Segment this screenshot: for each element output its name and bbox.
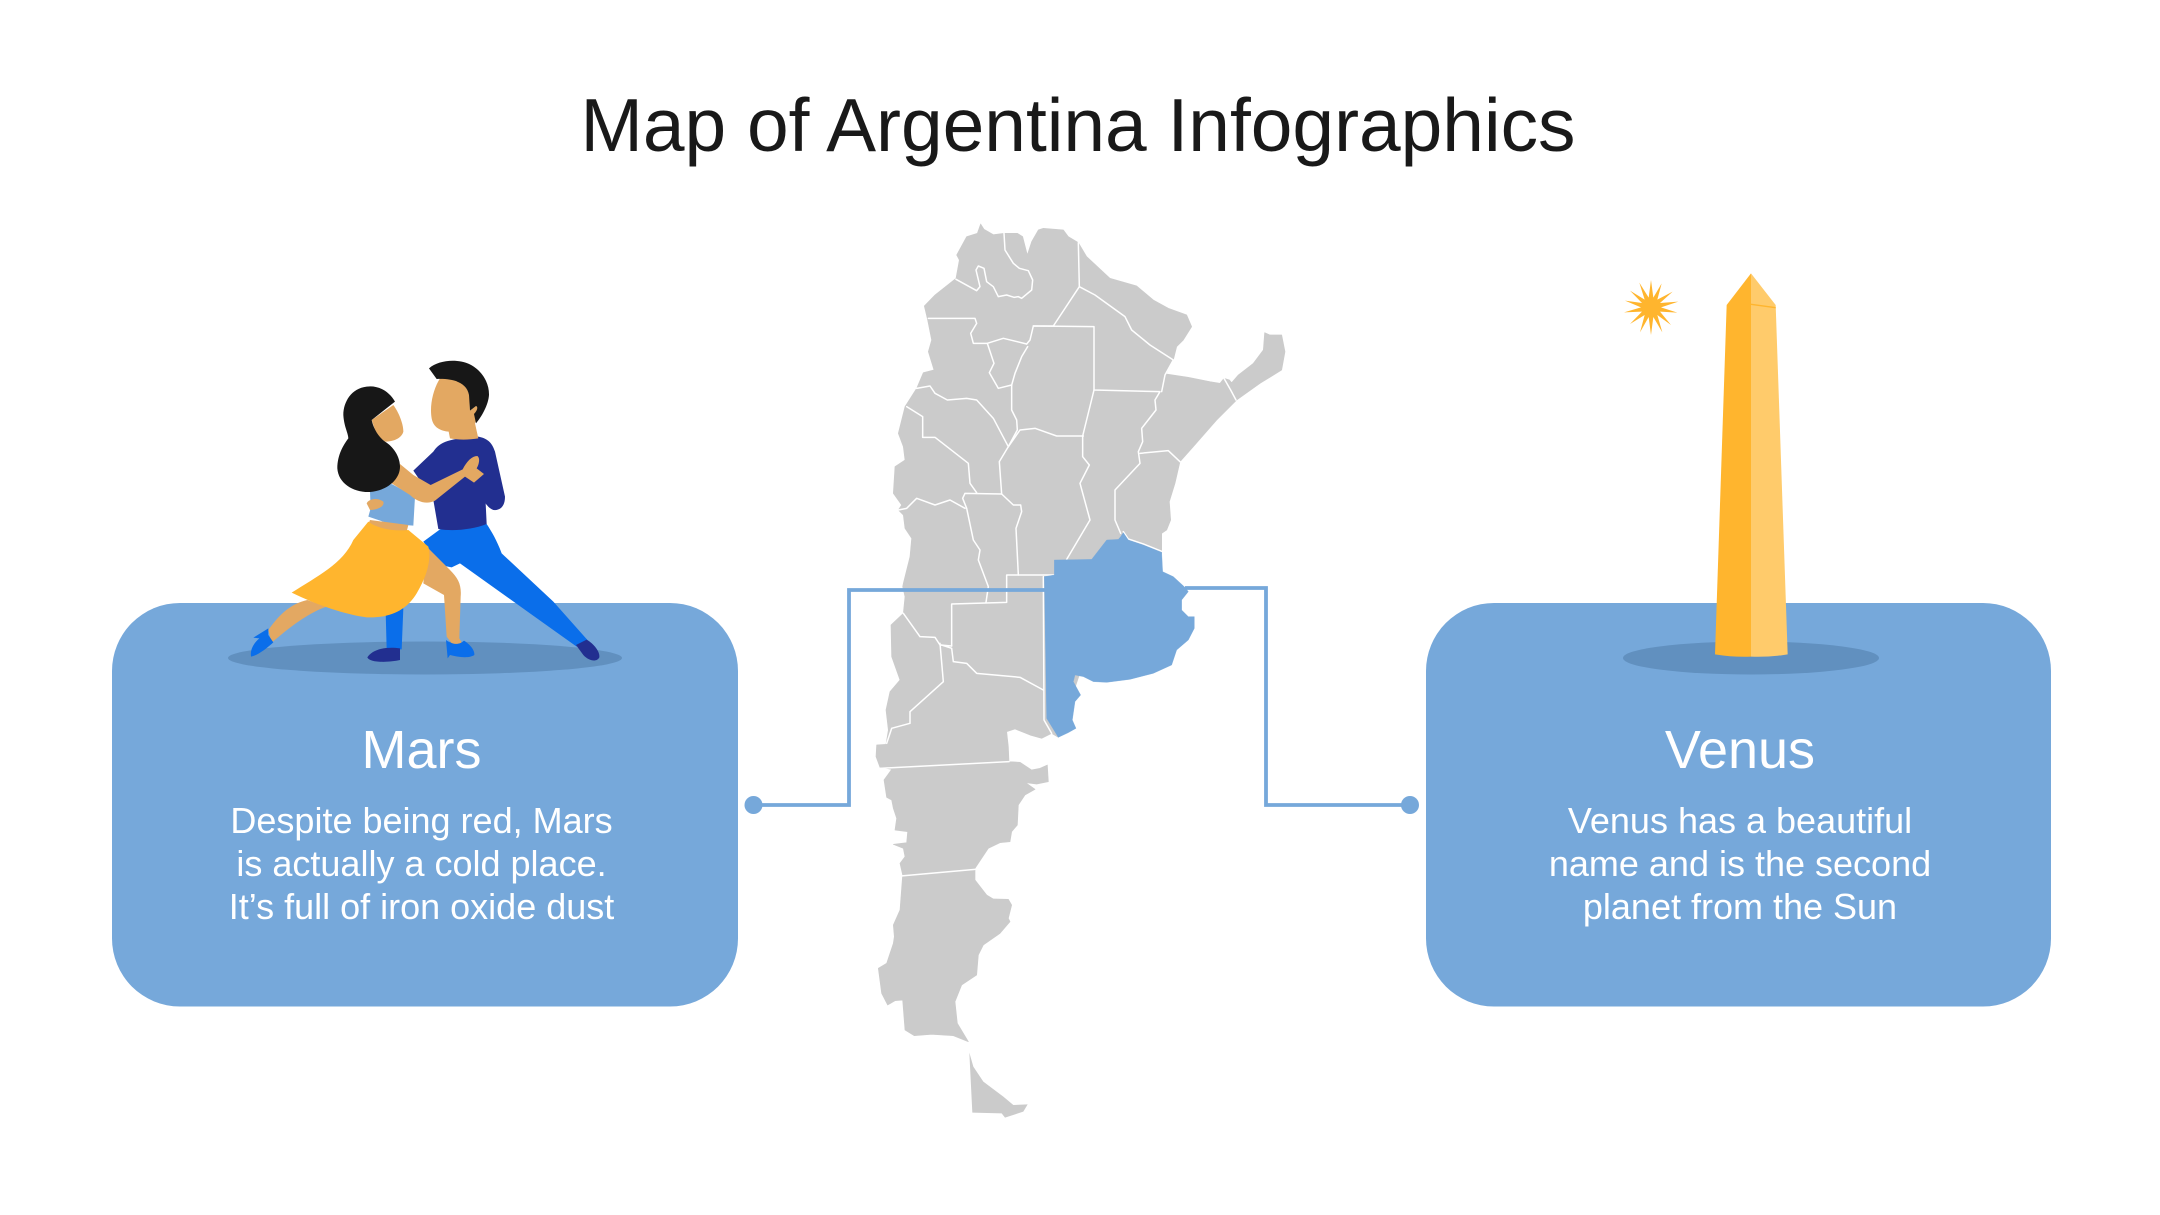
connector: right dot to Buenos Aires (1185, 588, 1419, 814)
woman's front leg (423, 547, 463, 646)
text: Venus description (1549, 800, 1931, 927)
woman's right shoe (446, 640, 474, 658)
shadow: under obelisk (1623, 642, 1879, 674)
man's hair (429, 361, 489, 423)
panel: Venus card (1426, 603, 2051, 1006)
man's shoe, right (576, 640, 599, 660)
panel: Mars card (112, 603, 738, 1006)
man's extended leg (423, 524, 588, 647)
woman's skirt (292, 522, 429, 617)
map: province borders (880, 233, 1236, 876)
icon: sun (1624, 280, 1678, 335)
woman's arm and hands (392, 456, 484, 503)
heading: Mars: Mars (362, 720, 482, 780)
shadow: under dancers (228, 642, 622, 674)
woman's hair (337, 386, 400, 492)
map: gray provinces silhouette (876, 224, 1285, 1042)
woman's top (368, 484, 415, 526)
icon: obelisk (1624, 273, 1788, 657)
woman's midriff (368, 520, 408, 533)
man's standing leg (386, 608, 403, 649)
text: Venus description: name and is the second (1549, 843, 1931, 884)
map: Tierra del Fuego (969, 1053, 1028, 1118)
woman's face (372, 405, 403, 442)
text: Mars description (229, 800, 614, 927)
man's torso (413, 437, 505, 530)
obelisk capstone seam (1751, 304, 1776, 308)
map of Argentina (876, 224, 1285, 1118)
man's hand on her back (367, 499, 384, 510)
obelisk dark face (1715, 273, 1751, 657)
man's head (431, 377, 480, 440)
woman's left shoe (251, 628, 273, 657)
text: Venus description: planet from the Sun (1583, 886, 1897, 927)
text: Mars description: Despite being red, Mars (230, 800, 613, 841)
map: highlighted Buenos Aires province (1044, 533, 1194, 737)
connector: left dot to Buenos Aires (744, 590, 1045, 814)
text: Mars description: It’s full of iron oxide dust (229, 886, 614, 927)
woman's back leg (268, 600, 327, 643)
text: Mars description: is actually a cold place. (236, 843, 607, 884)
man's shoe, left (367, 648, 400, 662)
heading: Venus: Venus (1665, 720, 1815, 780)
icon: tango dancers (251, 361, 599, 662)
obelisk light face (1751, 273, 1788, 657)
text: Venus description: Venus has a beautiful (1568, 800, 1912, 841)
title: Map of Argentina Infographics (580, 83, 1576, 167)
